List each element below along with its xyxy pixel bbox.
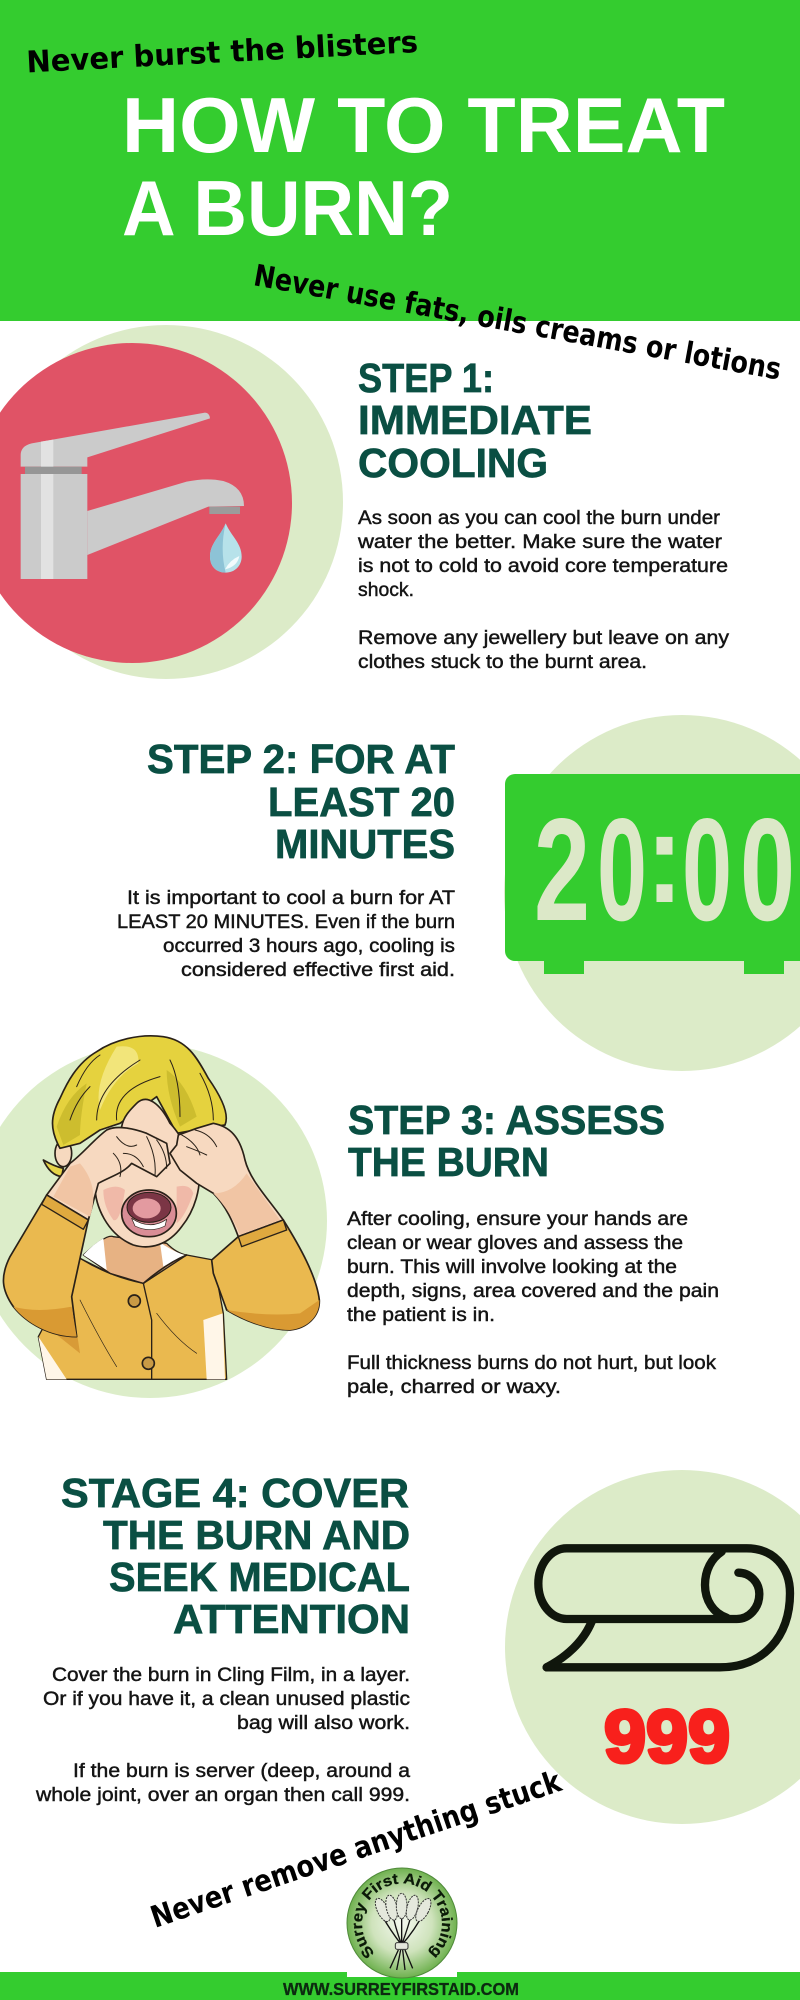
emergency number: 999: [604, 1695, 730, 1778]
body text: step 1: [357, 507, 729, 673]
icon: digital clock: [505, 774, 800, 974]
panel: step 2 text: [117, 736, 455, 981]
heading: stage 4: [61, 1470, 410, 1642]
body text: step 3: After cooling, ensure your hands are: [347, 1208, 688, 1230]
background circle: [0, 325, 343, 679]
body text: step 2: [117, 887, 455, 981]
heading: step 1: STEP 1:: [358, 355, 494, 401]
background circle: [0, 1044, 327, 1398]
red circle: [0, 343, 292, 663]
body text: step 2: occurred 3 hours ago, cooling is: [163, 935, 455, 957]
warning: never burst the blisters: Never burst the blisters: [26, 25, 419, 80]
illustration: crying child: [3, 1036, 319, 1379]
title: HOW TO TREAT: [122, 81, 725, 169]
heading: stage 4: SEEK MEDICAL: [109, 1554, 410, 1600]
heading: stage 4: STAGE 4: COVER: [61, 1470, 409, 1516]
heading: step 1: IMMEDIATE: [358, 397, 592, 443]
header banner: [0, 0, 800, 321]
warning: never remove anything stuck: Never remove anything stuck: [146, 1764, 567, 1936]
icon: wheat sheaf: [372, 1893, 434, 1970]
body text: step 3: the patient is in.: [347, 1304, 495, 1326]
heading: step 2: [147, 736, 455, 867]
icon: digital clock: 0: [597, 788, 647, 951]
body text: step 2: considered effective first aid.: [181, 959, 455, 981]
background circle: [504, 715, 800, 1071]
icon: digital clock: 2: [534, 788, 590, 951]
heading: step 3: THE BURN: [348, 1139, 549, 1185]
icon: tap with water drop: [21, 413, 244, 579]
website address: WWW.SURREYFIRSTAID.COM: [283, 1979, 519, 1999]
body text: step 3: pale, charred or waxy.: [347, 1376, 561, 1398]
body text: step 1: is not to cold to avoid core temperature: [358, 555, 728, 577]
body text: step 1: clothes stuck to the burnt area.: [358, 651, 647, 673]
panel: step 4 illustration: [505, 1470, 800, 1824]
panel: step 1 text: [357, 355, 729, 673]
body text: step 3: clean or wear gloves and assess the: [347, 1232, 683, 1254]
heading: step 1: [358, 355, 592, 486]
icon: digital clock: :: [646, 786, 684, 930]
icon: roll of cling film: [538, 1548, 790, 1667]
body text: step 3: depth, signs, area covered and the pain: [347, 1280, 719, 1302]
heading: step 3: STEP 3: ASSESS: [348, 1097, 665, 1143]
body text: stage 4: whole joint, over an organ then call 999.: [35, 1784, 410, 1806]
heading: step 1: COOLING: [358, 440, 548, 486]
body text: step 1: Remove any jewellery but leave on any: [358, 627, 729, 649]
body text: step 2: It is important to cool a burn for AT: [127, 887, 455, 909]
body text: stage 4: If the burn is server (deep, around a: [73, 1760, 410, 1782]
logo: Surrey First Aid Training: Surrey First Aid Training: [354, 1873, 453, 1958]
body text: step 3: [347, 1208, 719, 1398]
heading: step 2: MINUTES: [275, 821, 455, 867]
icon: digital clock: 0: [682, 788, 732, 951]
body text: step 3: burn. This will involve looking at the: [347, 1256, 677, 1278]
body text: step 2: LEAST 20 MINUTES. Even if the burn: [117, 911, 455, 933]
background circle: [505, 1470, 800, 1824]
body text: stage 4: [35, 1664, 410, 1806]
body text: step 1: As soon as you can cool the burn under: [358, 507, 721, 529]
body text: stage 4: Cover the burn in Cling Film, in a layer.: [52, 1664, 410, 1686]
heading: stage 4: THE BURN AND: [103, 1512, 410, 1558]
body text: stage 4: Or if you have it, a clean unused plastic: [43, 1688, 410, 1710]
heading: step 2: STEP 2: FOR AT: [147, 736, 455, 782]
panel: step 1 illustration: [0, 325, 343, 679]
title: [122, 81, 725, 252]
panel: step 2 illustration: [504, 715, 800, 1071]
heading: step 2: LEAST 20: [268, 779, 455, 825]
body text: step 1: water the better. Make sure the water: [357, 531, 723, 553]
panel: step 4 text: [35, 1470, 410, 1806]
body text: step 3: Full thickness burns do not hurt, but look: [347, 1352, 716, 1374]
body text: stage 4: bag will also work.: [237, 1712, 410, 1734]
heading: step 3: [348, 1097, 665, 1185]
body text: step 1: shock.: [358, 579, 414, 601]
footer bar: [0, 1972, 800, 2000]
heading: stage 4: ATTENTION: [173, 1596, 410, 1642]
title: A BURN?: [122, 164, 453, 252]
panel: step 3 illustration: [0, 1036, 327, 1398]
panel: step 3 text: [347, 1097, 719, 1398]
